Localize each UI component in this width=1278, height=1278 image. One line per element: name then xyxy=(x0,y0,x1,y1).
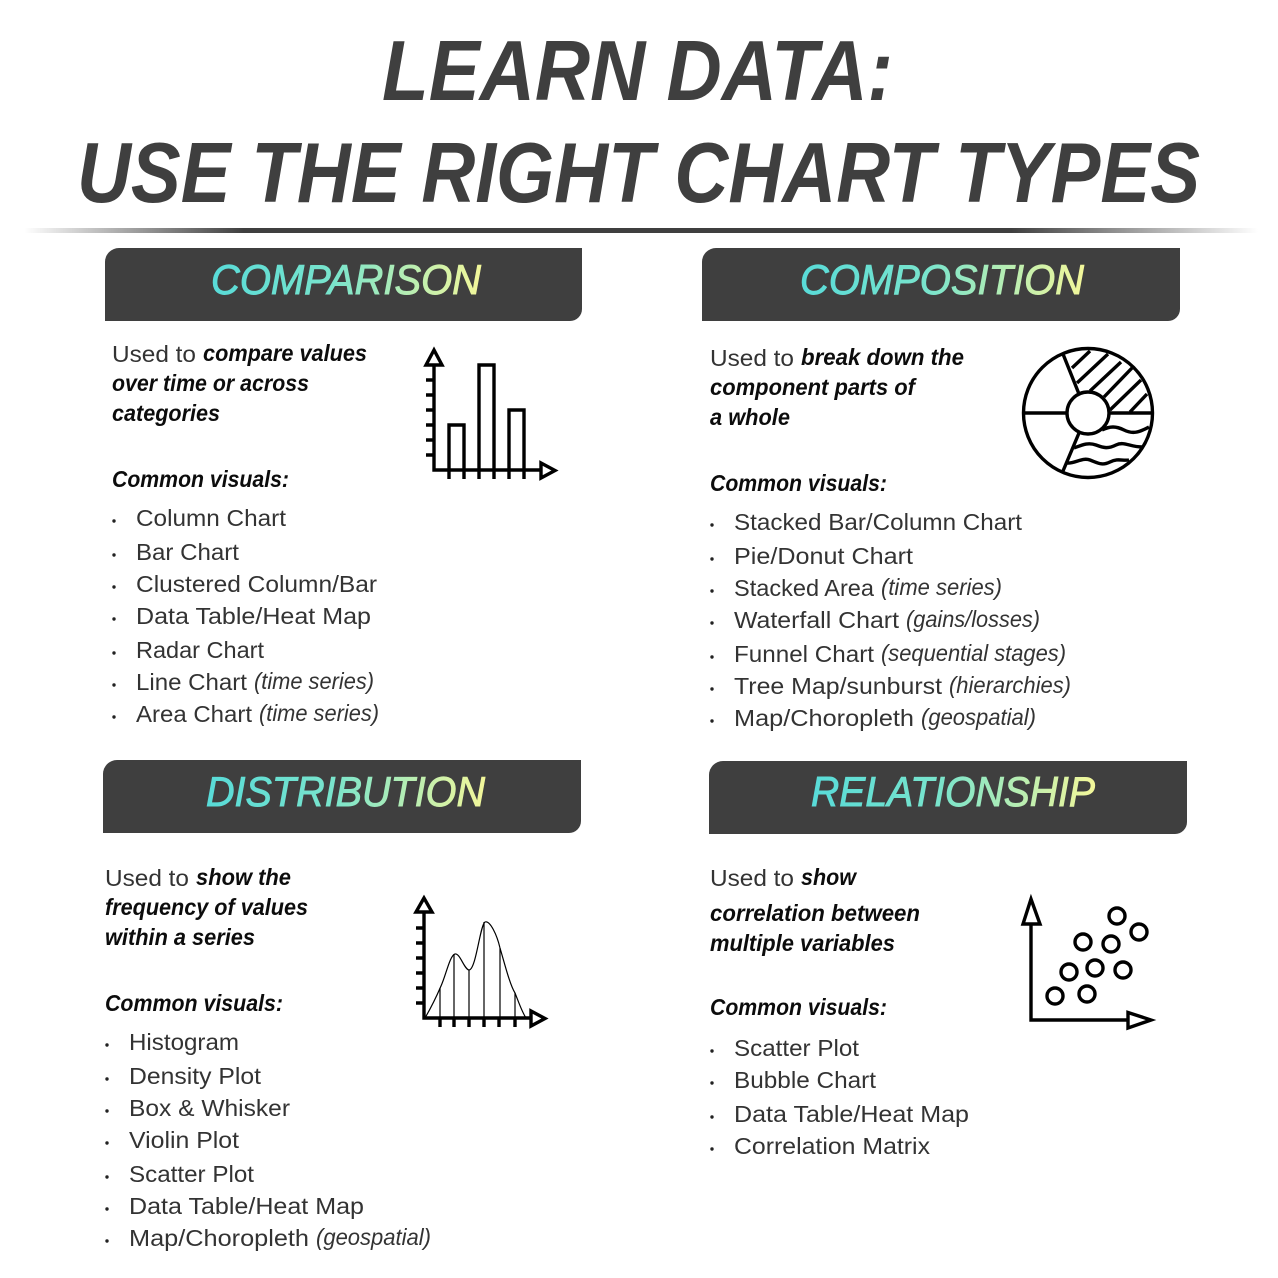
list: composition visuals xyxy=(710,509,1071,731)
description: distribution: frequency of values xyxy=(105,894,308,920)
list: comparison visuals: Data Table/Heat Map xyxy=(136,603,371,629)
description: distribution xyxy=(105,864,308,950)
list: composition visuals: Stacked Bar/Column Chart xyxy=(734,509,1022,535)
description: comparison: categories xyxy=(112,400,220,426)
list: composition visuals: Stacked Area xyxy=(734,575,875,601)
list: relationship visuals: Bubble Chart xyxy=(734,1067,876,1093)
list: relationship visuals xyxy=(710,1035,969,1159)
description: relationship: Used to xyxy=(710,865,794,891)
description: composition: a whole xyxy=(710,404,790,430)
list: composition visuals: Map/Choropleth xyxy=(734,705,914,731)
list: relationship visuals: Correlation Matrix xyxy=(734,1133,930,1159)
description: comparison: over time or across xyxy=(112,370,309,396)
description: comparison xyxy=(112,340,367,426)
panel: distribution xyxy=(103,760,581,1251)
list: distribution visuals: (geospatial) xyxy=(316,1224,431,1250)
list: distribution visuals: Data Table/Heat Map xyxy=(129,1193,364,1219)
list: composition visuals: (gains/losses) xyxy=(906,606,1040,632)
list: relationship visuals: Data Table/Heat Map xyxy=(734,1101,969,1127)
list: comparison visuals: (time series) xyxy=(254,668,374,694)
heading: comparison: COMPARISON xyxy=(211,256,482,303)
list: comparison visuals: Line Chart xyxy=(136,669,247,695)
heading: distribution: DISTRIBUTION xyxy=(206,768,486,815)
list: comparison visuals xyxy=(112,505,379,727)
list: distribution visuals: Histogram xyxy=(129,1029,239,1055)
list: comparison visuals: Column Chart xyxy=(136,505,286,531)
heading: comparison xyxy=(105,248,582,321)
subheading: common visuals: Common visuals: xyxy=(710,470,887,496)
heading: composition xyxy=(702,248,1180,321)
icon: density plot xyxy=(416,898,545,1027)
heading: composition: COMPOSITION xyxy=(800,256,1085,303)
list: composition visuals: (hierarchies) xyxy=(949,672,1071,698)
title: LEARN DATA: xyxy=(382,24,893,119)
description: relationship: multiple variables xyxy=(710,930,895,956)
list: relationship visuals: Scatter Plot xyxy=(734,1035,859,1061)
list: distribution visuals xyxy=(105,1029,431,1251)
list: comparison visuals: Area Chart xyxy=(136,701,252,727)
heading: relationship xyxy=(709,761,1187,834)
list: distribution visuals: Scatter Plot xyxy=(129,1161,254,1187)
description: distribution: show the xyxy=(196,864,291,890)
description: composition: Used to xyxy=(710,345,794,371)
icon: column chart xyxy=(426,350,555,479)
description: composition: component parts of xyxy=(710,374,917,400)
list: comparison visuals: Bar Chart xyxy=(136,539,239,565)
list: distribution visuals: Map/Choropleth xyxy=(129,1225,309,1251)
list: composition visuals: Tree Map/sunburst xyxy=(734,673,942,699)
title xyxy=(77,24,1200,221)
description: composition: break down the xyxy=(801,344,964,370)
heading: distribution xyxy=(103,760,581,833)
icon: scatter plot xyxy=(1023,899,1151,1028)
description: distribution: Used to xyxy=(105,865,189,891)
panel: comparison xyxy=(105,248,582,727)
description: relationship xyxy=(710,864,920,956)
subheading: common visuals: Common visuals: xyxy=(112,466,289,492)
list: distribution visuals: Violin Plot xyxy=(129,1127,239,1153)
description: distribution: within a series xyxy=(105,924,255,950)
list: composition visuals: Pie/Donut Chart xyxy=(734,543,913,569)
list: composition visuals: Funnel Chart xyxy=(734,641,874,667)
list: composition visuals: (sequential stages) xyxy=(881,640,1066,666)
panel: composition xyxy=(702,248,1180,731)
subheading: common visuals: Common visuals: xyxy=(710,994,887,1020)
list: comparison visuals: (time series) xyxy=(259,700,379,726)
list: comparison visuals: Radar Chart xyxy=(136,637,264,663)
heading: relationship: RELATIONSHIP xyxy=(811,768,1095,815)
description: comparison: Used to xyxy=(112,341,196,367)
description: relationship: show xyxy=(801,864,858,890)
subheading: common visuals: Common visuals: xyxy=(105,990,283,1016)
list: composition visuals: Waterfall Chart xyxy=(734,607,899,633)
list: distribution visuals: Density Plot xyxy=(129,1063,261,1089)
list: comparison visuals: Clustered Column/Bar xyxy=(136,571,377,597)
list: composition visuals: (time series) xyxy=(881,574,1002,600)
icon: pie chart xyxy=(1024,348,1152,478)
description: relationship: correlation between xyxy=(710,900,920,926)
description: comparison: compare values xyxy=(203,340,367,366)
list: composition visuals: (geospatial) xyxy=(921,704,1036,730)
description: composition xyxy=(710,344,964,430)
list: distribution visuals: Box & Whisker xyxy=(129,1095,290,1121)
panel: relationship xyxy=(709,761,1187,1159)
